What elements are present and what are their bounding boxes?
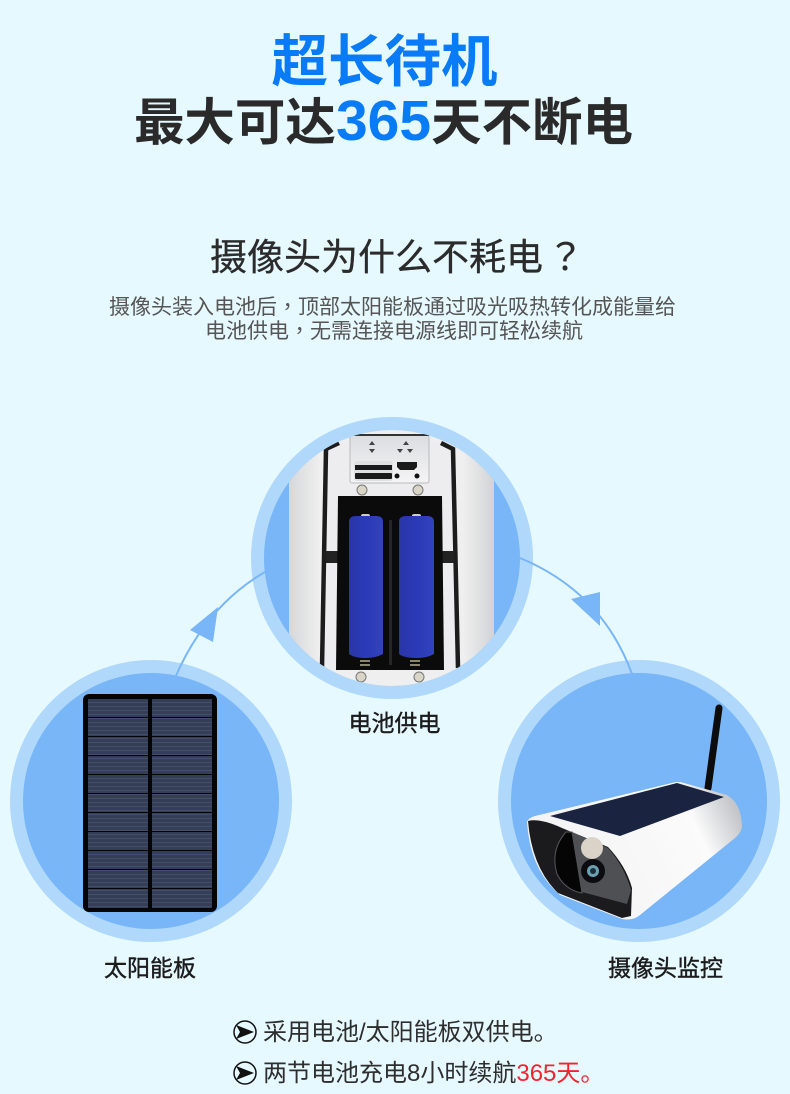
camera inner face xyxy=(572,832,631,904)
title: 超长待机 xyxy=(272,30,498,93)
label: camera: 摄像头监控 xyxy=(608,955,723,981)
bullet text 1: 采用电池/太阳能板双供电。 xyxy=(263,1019,558,1046)
icon: bullet arrow 1 xyxy=(234,1021,256,1043)
inner white back xyxy=(322,665,457,670)
lens xyxy=(581,859,605,883)
battery right xyxy=(399,514,434,658)
port icons xyxy=(369,441,413,453)
dark ring xyxy=(555,832,582,893)
description text xyxy=(109,291,676,345)
subtitle: 最大可达365天不断电 xyxy=(134,89,633,153)
motion sensor xyxy=(581,837,603,859)
arrow: battery to camera xyxy=(520,558,632,674)
solar cells xyxy=(88,699,212,908)
description text: 摄像头装入电池后，顶部太阳能板通过吸光吸热转化成能量给 xyxy=(109,291,676,321)
camera solar top xyxy=(550,783,724,836)
label: battery: 电池供电 xyxy=(348,710,440,736)
arrow: panel to battery xyxy=(175,572,265,678)
section heading: 摄像头为什么不耗电？ xyxy=(210,227,584,281)
circle: solar panel xyxy=(10,660,292,942)
springs xyxy=(360,661,420,665)
camera front opening xyxy=(528,820,632,918)
camera body back xyxy=(289,420,494,700)
battery photo xyxy=(289,420,494,700)
icon: bullet arrow 2 xyxy=(234,1062,256,1084)
description text: 电池供电，无需连接电源线即可轻松续航 xyxy=(205,315,583,345)
antenna xyxy=(708,708,719,788)
mounting tabs xyxy=(326,551,454,563)
camera housing xyxy=(527,782,742,920)
battery bay xyxy=(336,496,444,670)
circle: camera xyxy=(498,660,780,942)
battery left xyxy=(349,514,383,658)
bullet text 2: 两节电池充电8小时续航365天。 xyxy=(263,1060,604,1087)
screws xyxy=(356,485,424,682)
label: solar panel: 太阳能板 xyxy=(104,955,196,981)
solar panel frame xyxy=(83,694,217,912)
silver port plate xyxy=(350,435,429,483)
black trim lines xyxy=(322,443,458,668)
circle: battery compartment xyxy=(251,417,533,700)
